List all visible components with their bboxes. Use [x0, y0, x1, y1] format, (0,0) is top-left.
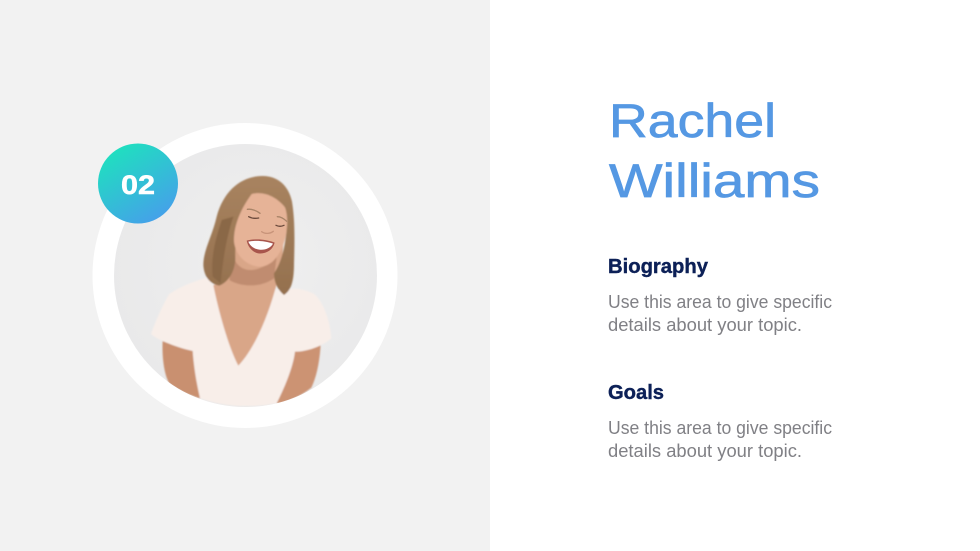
name heading: Rachel [609, 94, 776, 147]
number badge [98, 144, 178, 224]
left grey panel [0, 0, 490, 551]
biography text: details about your topic. [608, 315, 802, 335]
number badge: 02 [121, 170, 155, 200]
biography text [608, 292, 832, 335]
goals text [608, 418, 832, 461]
portrait photo of smiling woman [110, 140, 382, 412]
goals text: Use this area to give specific [608, 418, 832, 438]
name heading [609, 94, 820, 207]
biography text: Use this area to give specific [608, 292, 832, 312]
goals heading: Goals [608, 382, 664, 404]
goals text: details about your topic. [608, 441, 802, 461]
white ring around portrait [92, 123, 398, 428]
biography heading: Biography [608, 256, 709, 278]
name heading: Williams [609, 154, 820, 207]
